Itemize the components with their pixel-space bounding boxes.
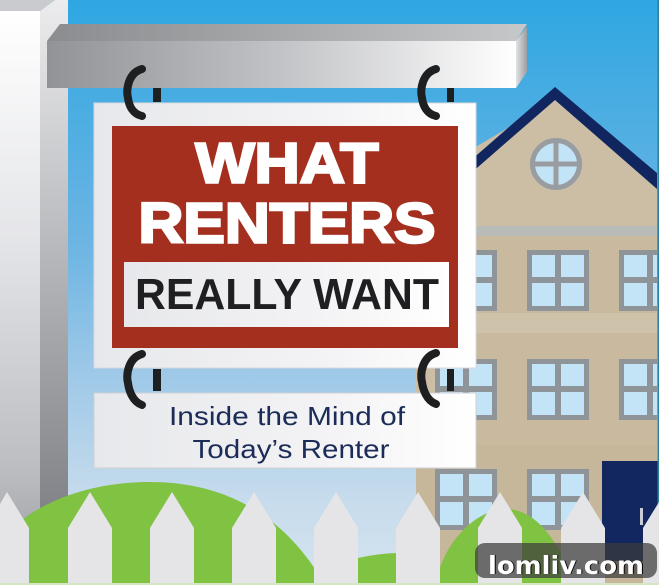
subtitle: Inside the Mind of: [169, 401, 406, 431]
watermark: [475, 543, 657, 580]
roof: [470, 87, 657, 189]
rear hook pieces: [153, 88, 454, 391]
main sign: [94, 103, 476, 368]
fence: [0, 492, 659, 585]
hills: [0, 482, 573, 585]
horizontal beam: [47, 24, 527, 88]
eave band: [440, 226, 657, 236]
heading: renters: RENTERS: [138, 192, 436, 256]
hooks: [127, 69, 436, 405]
windows: [435, 250, 657, 530]
house wall: [416, 100, 657, 585]
red panel: [112, 126, 458, 348]
sign board: [94, 103, 476, 368]
lower sign board: [94, 393, 476, 468]
lower sign: Today’s Renter: [192, 434, 390, 464]
round attic window: [532, 140, 580, 188]
right edge line: [658, 0, 659, 585]
door: [602, 461, 658, 561]
lower sign: [94, 393, 476, 468]
watermark: lomliv.com: [488, 551, 644, 580]
heading: what: WHAT: [196, 132, 379, 196]
house: [416, 87, 658, 585]
heading: really want: REALLY WANT: [135, 270, 439, 319]
white banner: [124, 262, 449, 327]
fence base strip: [0, 583, 659, 585]
watermark: lomliv.com: [489, 551, 645, 580]
post: [0, 0, 68, 585]
